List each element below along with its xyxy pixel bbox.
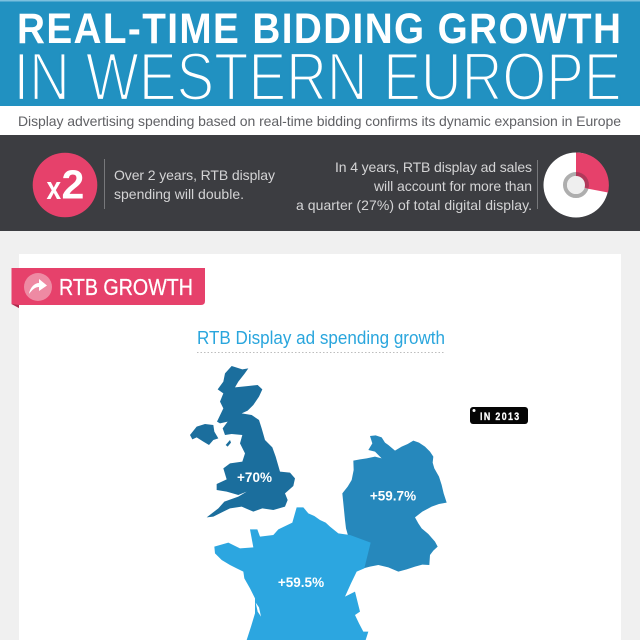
icon: share arrow <box>24 273 52 301</box>
map: United Kingdom <box>190 366 295 517</box>
title line 1: REAL-TIME BIDDING GROWTH <box>17 4 621 52</box>
x2 badge <box>33 153 97 217</box>
panel: RTB growth <box>12 254 621 640</box>
header banner <box>0 0 640 115</box>
fact: spending doubles <box>114 167 275 202</box>
fact: spending doubles: Over 2 years, RTB display <box>114 167 275 183</box>
map: Germany <box>342 435 447 572</box>
map: Germany: +59.7% <box>370 488 416 504</box>
fact: quarter of display <box>296 159 532 213</box>
ribbon heading: RTB GROWTH <box>59 274 193 300</box>
subtitle strip <box>0 106 640 135</box>
donut chart: 27% <box>544 152 609 218</box>
map: United Kingdom: +70% <box>237 470 272 485</box>
fact: quarter of display: a quarter (27%) of total digital display. <box>296 197 532 213</box>
year tag: IN 2013 <box>480 411 520 423</box>
map: France: +59.5% <box>278 575 324 590</box>
subtitle strip: Display advertising spending based on real-time bidding confirms its dynamic expansion in Europe <box>18 113 621 129</box>
fact: quarter of display: will account for more than <box>373 178 532 194</box>
x2 badge: 2 <box>62 162 84 208</box>
fact: quarter of display: In 4 years, RTB display ad sales <box>335 159 532 175</box>
dark key-facts band <box>0 135 640 231</box>
year tag <box>470 407 528 424</box>
chart heading: RTB Display ad spending growth <box>197 328 445 348</box>
ribbon heading <box>12 268 205 308</box>
map: France <box>214 507 371 640</box>
fact: spending doubles: spending will double. <box>114 186 244 202</box>
x2 badge: x <box>46 170 62 207</box>
